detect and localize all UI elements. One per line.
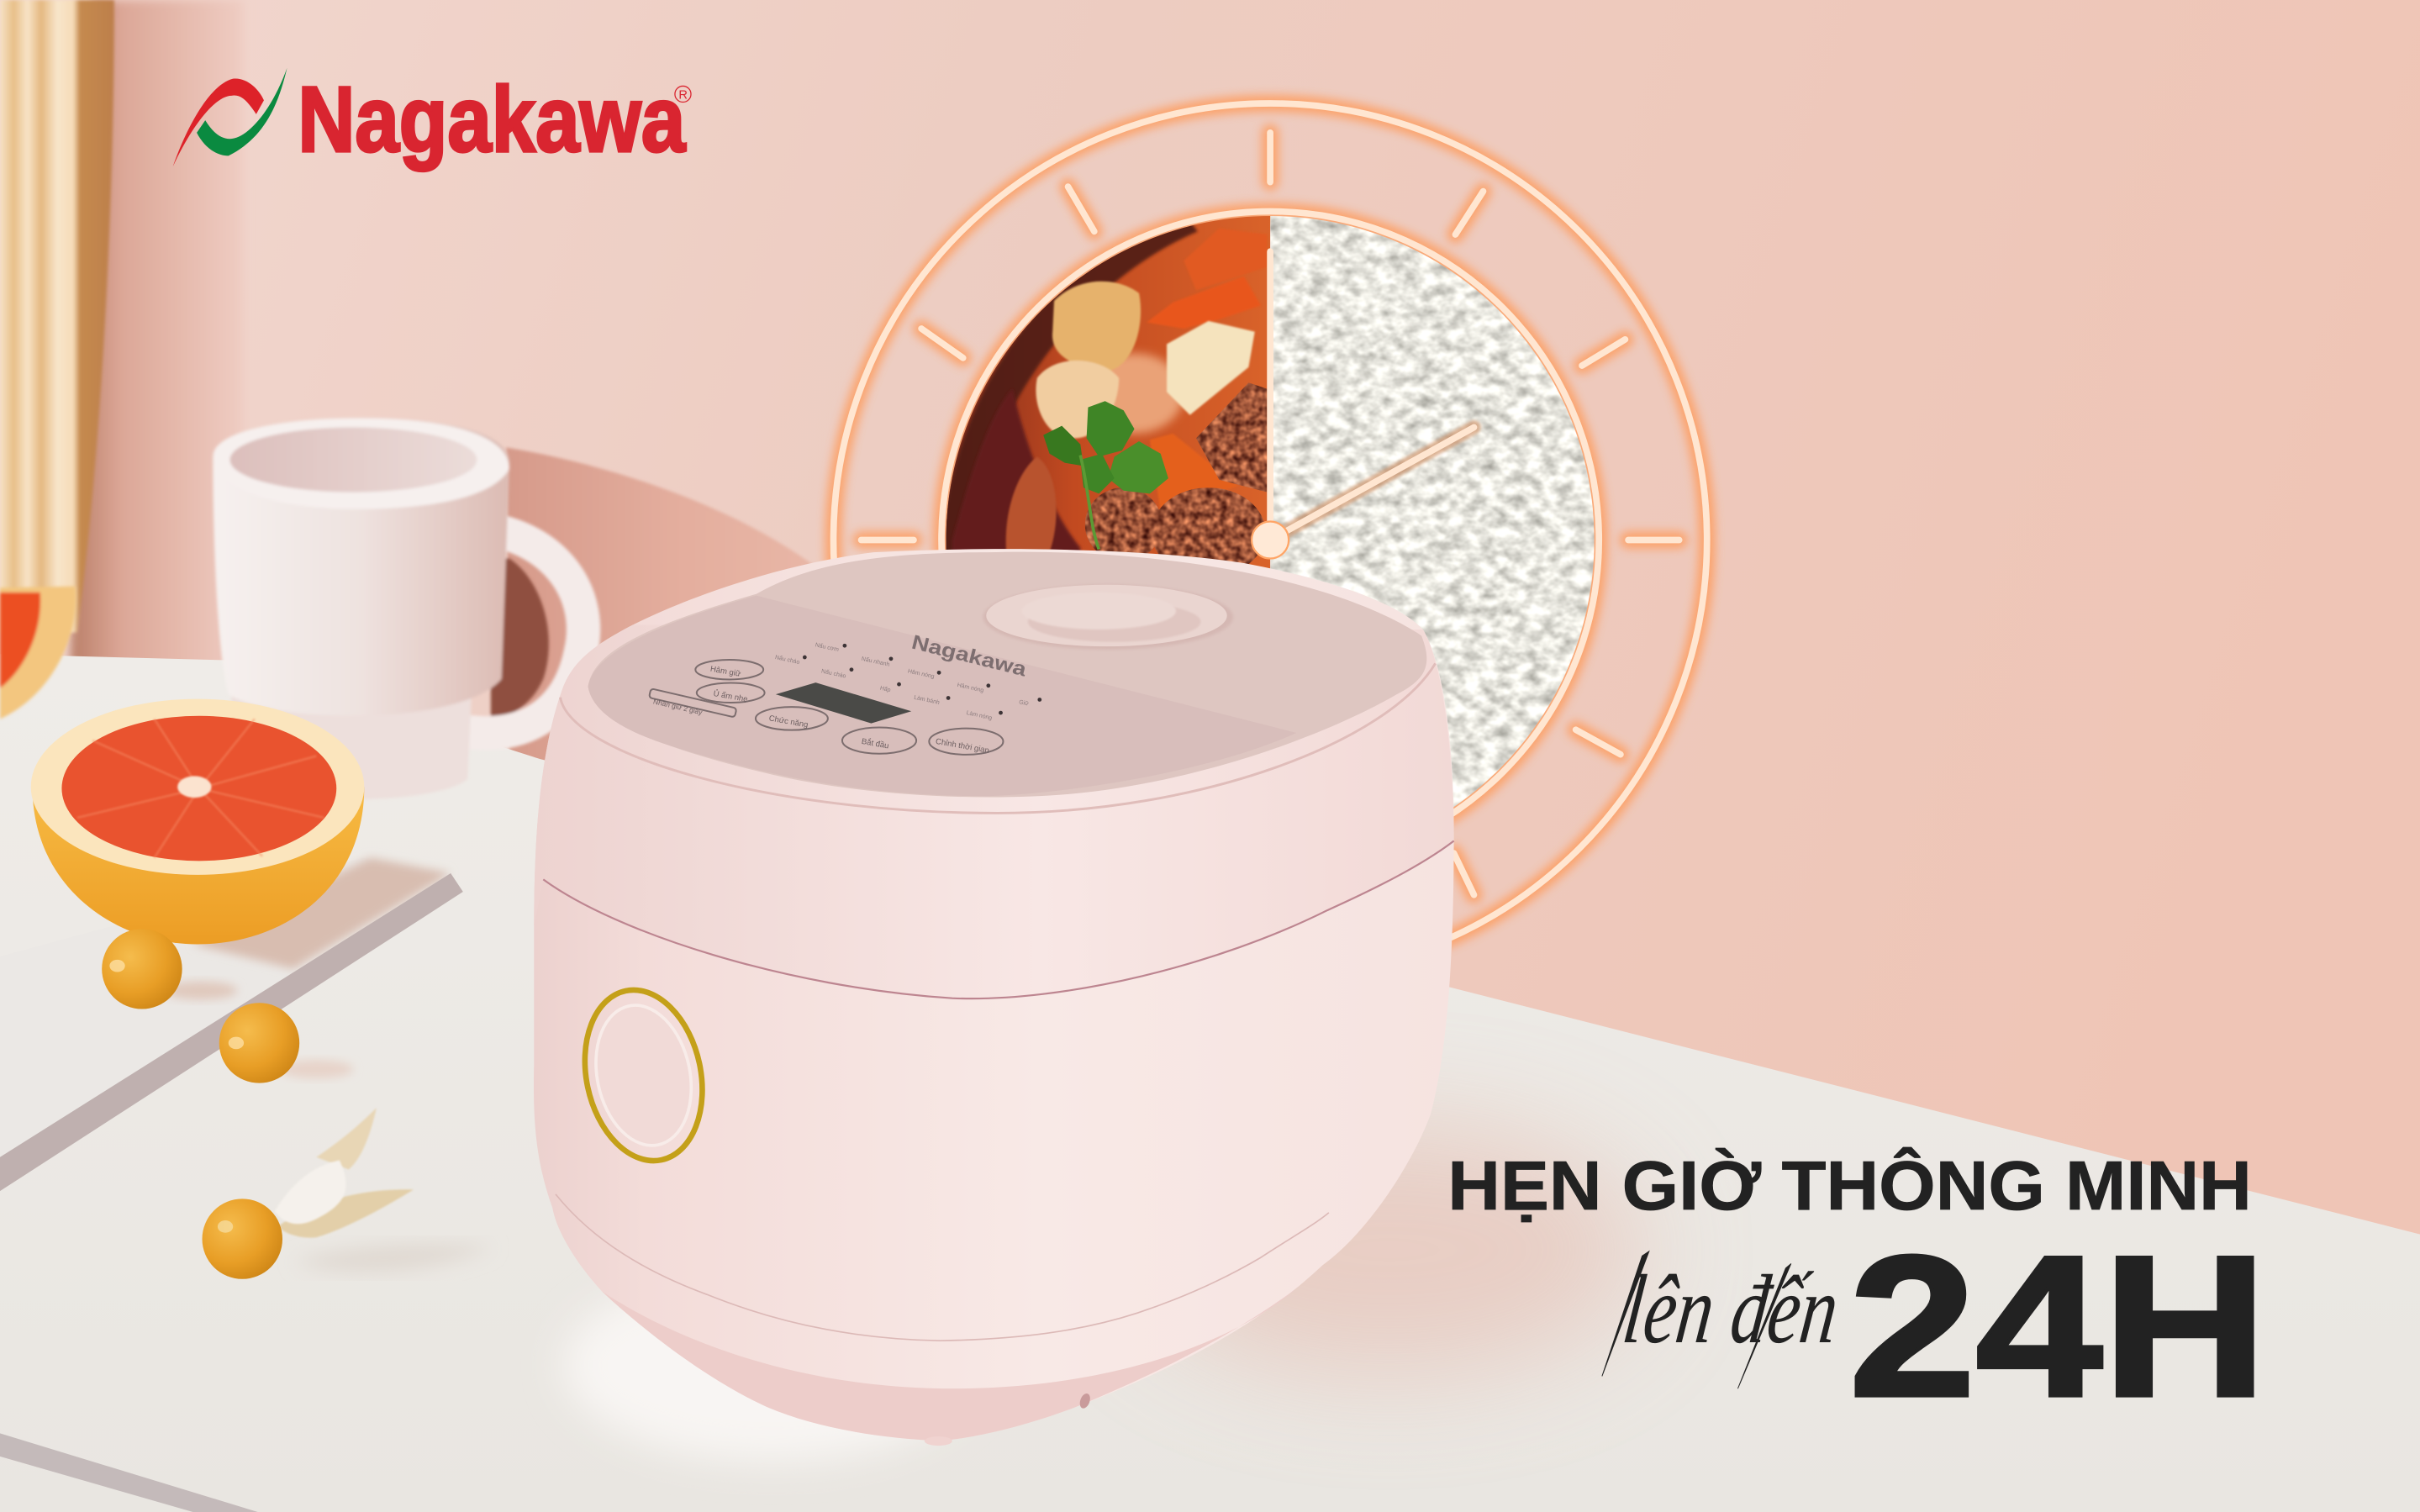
golden berries	[102, 929, 494, 1279]
shaded nook behind mug	[506, 447, 841, 833]
base seam	[556, 1194, 1329, 1341]
lid rim highlight	[561, 663, 1436, 813]
steam vent knob	[983, 585, 1233, 650]
grapefruit core	[177, 776, 212, 798]
dark pot rim	[946, 225, 1199, 550]
registered mark: R	[678, 88, 688, 102]
vent hole	[1078, 1392, 1092, 1409]
clock graphic	[833, 103, 1707, 977]
logo wordmark: Nagakawa	[298, 68, 686, 171]
mug foot	[231, 679, 472, 799]
grapefruit segments	[77, 719, 324, 858]
mode indicator lights	[803, 644, 1041, 714]
24H big figure: 24H	[1849, 1214, 2267, 1438]
mode labels: Nấu cơm	[815, 640, 840, 653]
rice half	[1270, 216, 1595, 807]
grapefruit half	[31, 699, 364, 944]
grapefruit rim	[31, 699, 364, 875]
button labels	[652, 665, 990, 756]
clock centre	[1252, 521, 1289, 559]
LCD display	[776, 682, 911, 724]
registered mark	[675, 86, 691, 103]
clock glow	[833, 103, 1707, 977]
grapefruit shadow on notebook	[193, 858, 451, 969]
stew half	[946, 216, 1270, 568]
dark broth	[952, 392, 1083, 550]
Nagakawa logo	[173, 68, 691, 171]
rice cooker	[534, 549, 1454, 1446]
gold power ring	[570, 979, 717, 1172]
script subheading	[1602, 1251, 1844, 1388]
mug handle	[463, 528, 583, 733]
headline: HẸN GIỜ THÔNG MINH	[1447, 1146, 2252, 1225]
wall shadow behind board	[70, 0, 244, 679]
grapefruit rind	[33, 787, 364, 944]
beef chunks	[1085, 382, 1267, 577]
mug	[213, 418, 583, 799]
hour ticks	[862, 133, 1679, 895]
cilantro garnish	[1043, 401, 1168, 550]
cooker lower base	[602, 1288, 1296, 1441]
inner ring	[941, 211, 1599, 869]
button labels: Ủ ấm nhẹ	[713, 688, 749, 704]
grapefruit wedge	[0, 587, 76, 719]
logo swoosh	[173, 68, 287, 166]
mode labels: Làm bánh	[914, 695, 940, 706]
notebook top surface	[0, 858, 451, 1157]
table surface	[0, 654, 2420, 1512]
mode labels: Giữ	[1018, 699, 1030, 708]
mode labels	[774, 640, 1030, 721]
button labels: Chức năng	[768, 714, 809, 730]
carrots	[1147, 229, 1267, 512]
wooden cutting board	[0, 0, 114, 633]
lid seam	[543, 840, 1454, 998]
panel buttons	[649, 660, 1003, 755]
brand on panel: Nagakawa	[909, 631, 1030, 682]
mug body	[213, 418, 509, 716]
peach shadow of cooker on table	[1135, 1126, 1643, 1373]
mode labels: Làm nóng	[966, 710, 993, 721]
potato slice in broth	[1006, 456, 1057, 552]
berry 1	[102, 929, 238, 1009]
button labels: Nhấn giữ 2 giây	[652, 697, 704, 717]
clock rings and ticks	[833, 103, 1707, 977]
potatoes	[1036, 282, 1255, 438]
outer ring	[833, 103, 1707, 977]
notebook on table	[0, 858, 463, 1191]
white reflection beneath cooker	[563, 1270, 980, 1461]
button face	[583, 996, 704, 1155]
berry 2	[219, 1003, 353, 1083]
mode labels: Hâm nóng	[957, 682, 984, 694]
lid skirt	[534, 624, 1454, 998]
button labels: Bắt đầu	[861, 737, 889, 751]
mode labels: Nấu nhanh	[861, 655, 890, 668]
table bottom edge strip	[0, 1433, 258, 1512]
mode labels: Hâm nóng	[907, 668, 935, 680]
lid top face	[588, 552, 1426, 798]
button labels: Chỉnh thời gian	[935, 737, 990, 756]
script subheading: lên đến	[1618, 1255, 1844, 1364]
button labels: Hâm giữ	[709, 665, 742, 679]
grapefruit flesh	[61, 716, 336, 861]
cooker silhouette	[534, 549, 1454, 1441]
dark gap inside handle	[491, 559, 549, 722]
mode labels: Nấu cháo	[774, 653, 800, 666]
mug inside	[230, 427, 477, 493]
clock hands	[1252, 251, 1474, 559]
mode labels: Hấp	[879, 684, 892, 693]
berry 3 with husk	[203, 1108, 494, 1279]
mug rim	[213, 418, 509, 509]
pale broth	[1110, 348, 1185, 439]
notebook edge	[0, 873, 463, 1191]
control panel	[588, 596, 1296, 796]
mode labels: Nấu cháo	[820, 667, 847, 680]
foot	[925, 1436, 952, 1446]
